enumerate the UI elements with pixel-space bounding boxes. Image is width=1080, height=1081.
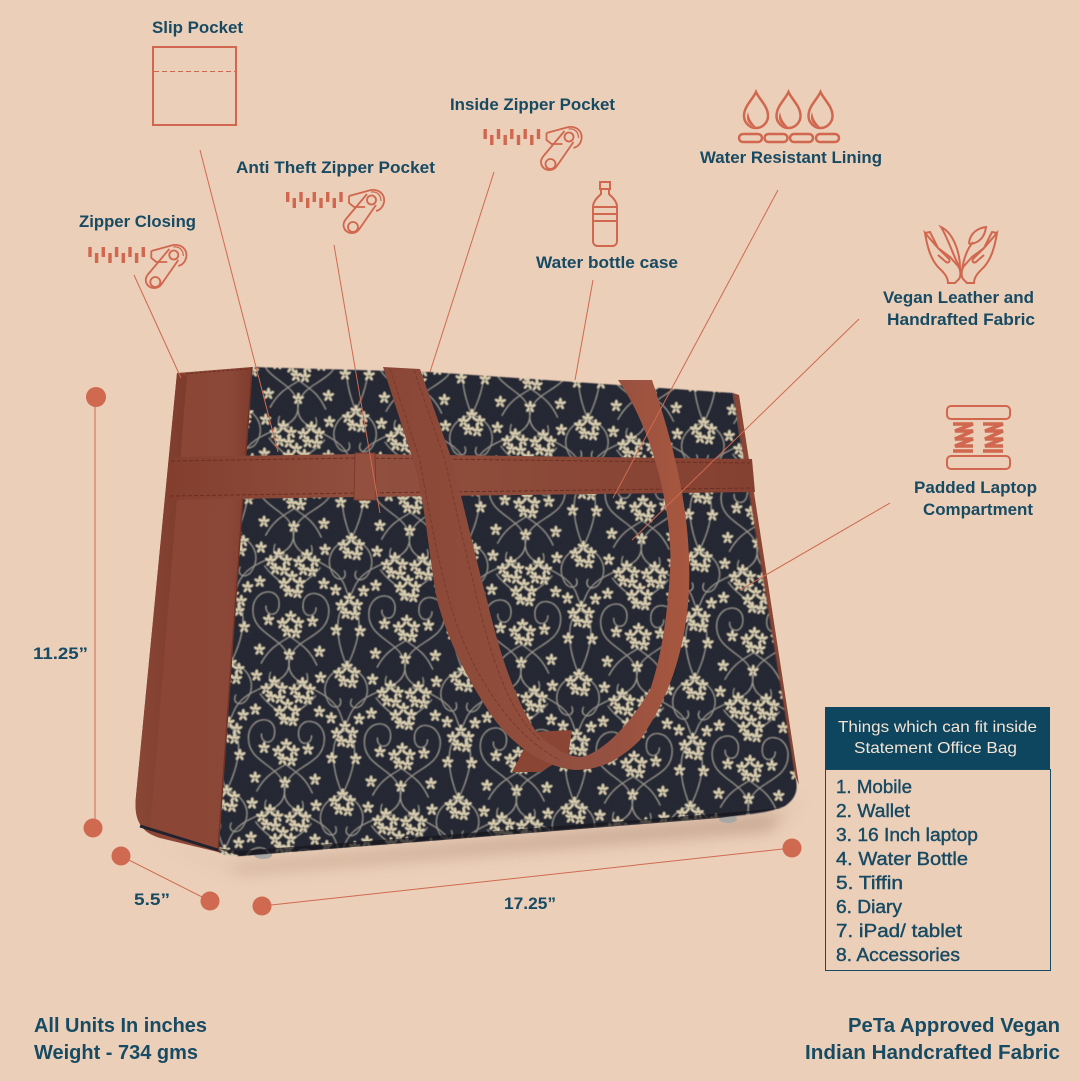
heading: slip pocket: Slip Pocket [152,18,243,37]
bag photo [136,367,800,872]
bag fabric body [216,367,797,856]
label: water resistant lining [700,92,882,167]
dimension: width [252,838,802,916]
belt band [168,453,755,500]
label: inside zipper pocket: Inside Zipper Pocket [450,95,615,114]
icon: zipper [485,127,582,170]
panel list: 7. iPad/ tablet [836,921,962,941]
dimension: depth: 5.5” [134,890,170,909]
label: padded laptop compartment: Compartment [923,500,1033,519]
label: padded laptop compartment: Padded Laptop [914,478,1037,497]
icon: zipper [90,245,186,288]
label: anti theft zipper pocket: Anti Theft Zipper Pocket [236,158,435,177]
dimension: height: 11.25” [33,644,88,663]
panel header: Things which can fit inside [838,719,1037,736]
footer: units and weight: All Units In inches [34,1015,207,1037]
footer: units and weight: Weight - 734 gms [34,1042,198,1064]
panel list: 4. Water Bottle [836,849,968,869]
right edge trim [733,393,799,785]
footer: units and weight [34,1015,207,1064]
dimension: width: 17.25” [504,894,556,913]
footer: certifications: PeTa Approved Vegan [848,1015,1060,1037]
panel header [825,707,1050,769]
footer: certifications [805,1015,1060,1064]
panel header: Statement Office Bag [854,740,1017,757]
icon: water bottle [593,182,617,246]
dimension: depth [112,846,220,910]
bag floor shadow [150,795,800,872]
label: padded laptop compartment [914,406,1037,519]
bag feet [254,815,737,859]
footer: certifications: Indian Handcrafted Fabric [805,1042,1060,1064]
panel list: 6. Diary [836,897,902,917]
panel list: 3. 16 Inch laptop [836,825,978,845]
label: water bottle case: Water bottle case [536,253,678,272]
label: inside zipper pocket [450,95,615,170]
shoulder strap [383,367,689,770]
panel list: 5. Tiffin [836,873,903,893]
label: slip pocket [152,18,243,125]
dimension: height [33,387,106,838]
panel: things which fit inside [825,707,1050,970]
leader lines [134,150,890,590]
handle tab [512,730,572,772]
side leather panel [136,367,252,852]
label: water bottle case [536,182,678,272]
bag bottom dark edge [216,808,782,856]
label: vegan leather: Handrafted Fabric [887,310,1035,329]
label: anti theft zipper pocket [236,158,435,233]
icon: slip pocket [153,47,236,125]
label: zipper closing: Zipper Closing [79,212,196,231]
icon: zipper [288,190,384,233]
label: zipper closing [79,212,196,288]
label: vegan leather: Vegan Leather and [883,288,1034,307]
panel list [826,770,1050,970]
panel list: 2. Wallet [836,801,910,821]
label: vegan leather [883,227,1035,329]
icon: water drops [739,92,839,142]
icon: padded springs [947,406,1010,469]
panel list: 1. Mobile [836,777,912,797]
panel list: 8. Accessories [836,945,960,965]
label: water resistant lining: Water Resistant Lining [700,148,882,167]
icon: hands with leaves [925,227,997,283]
